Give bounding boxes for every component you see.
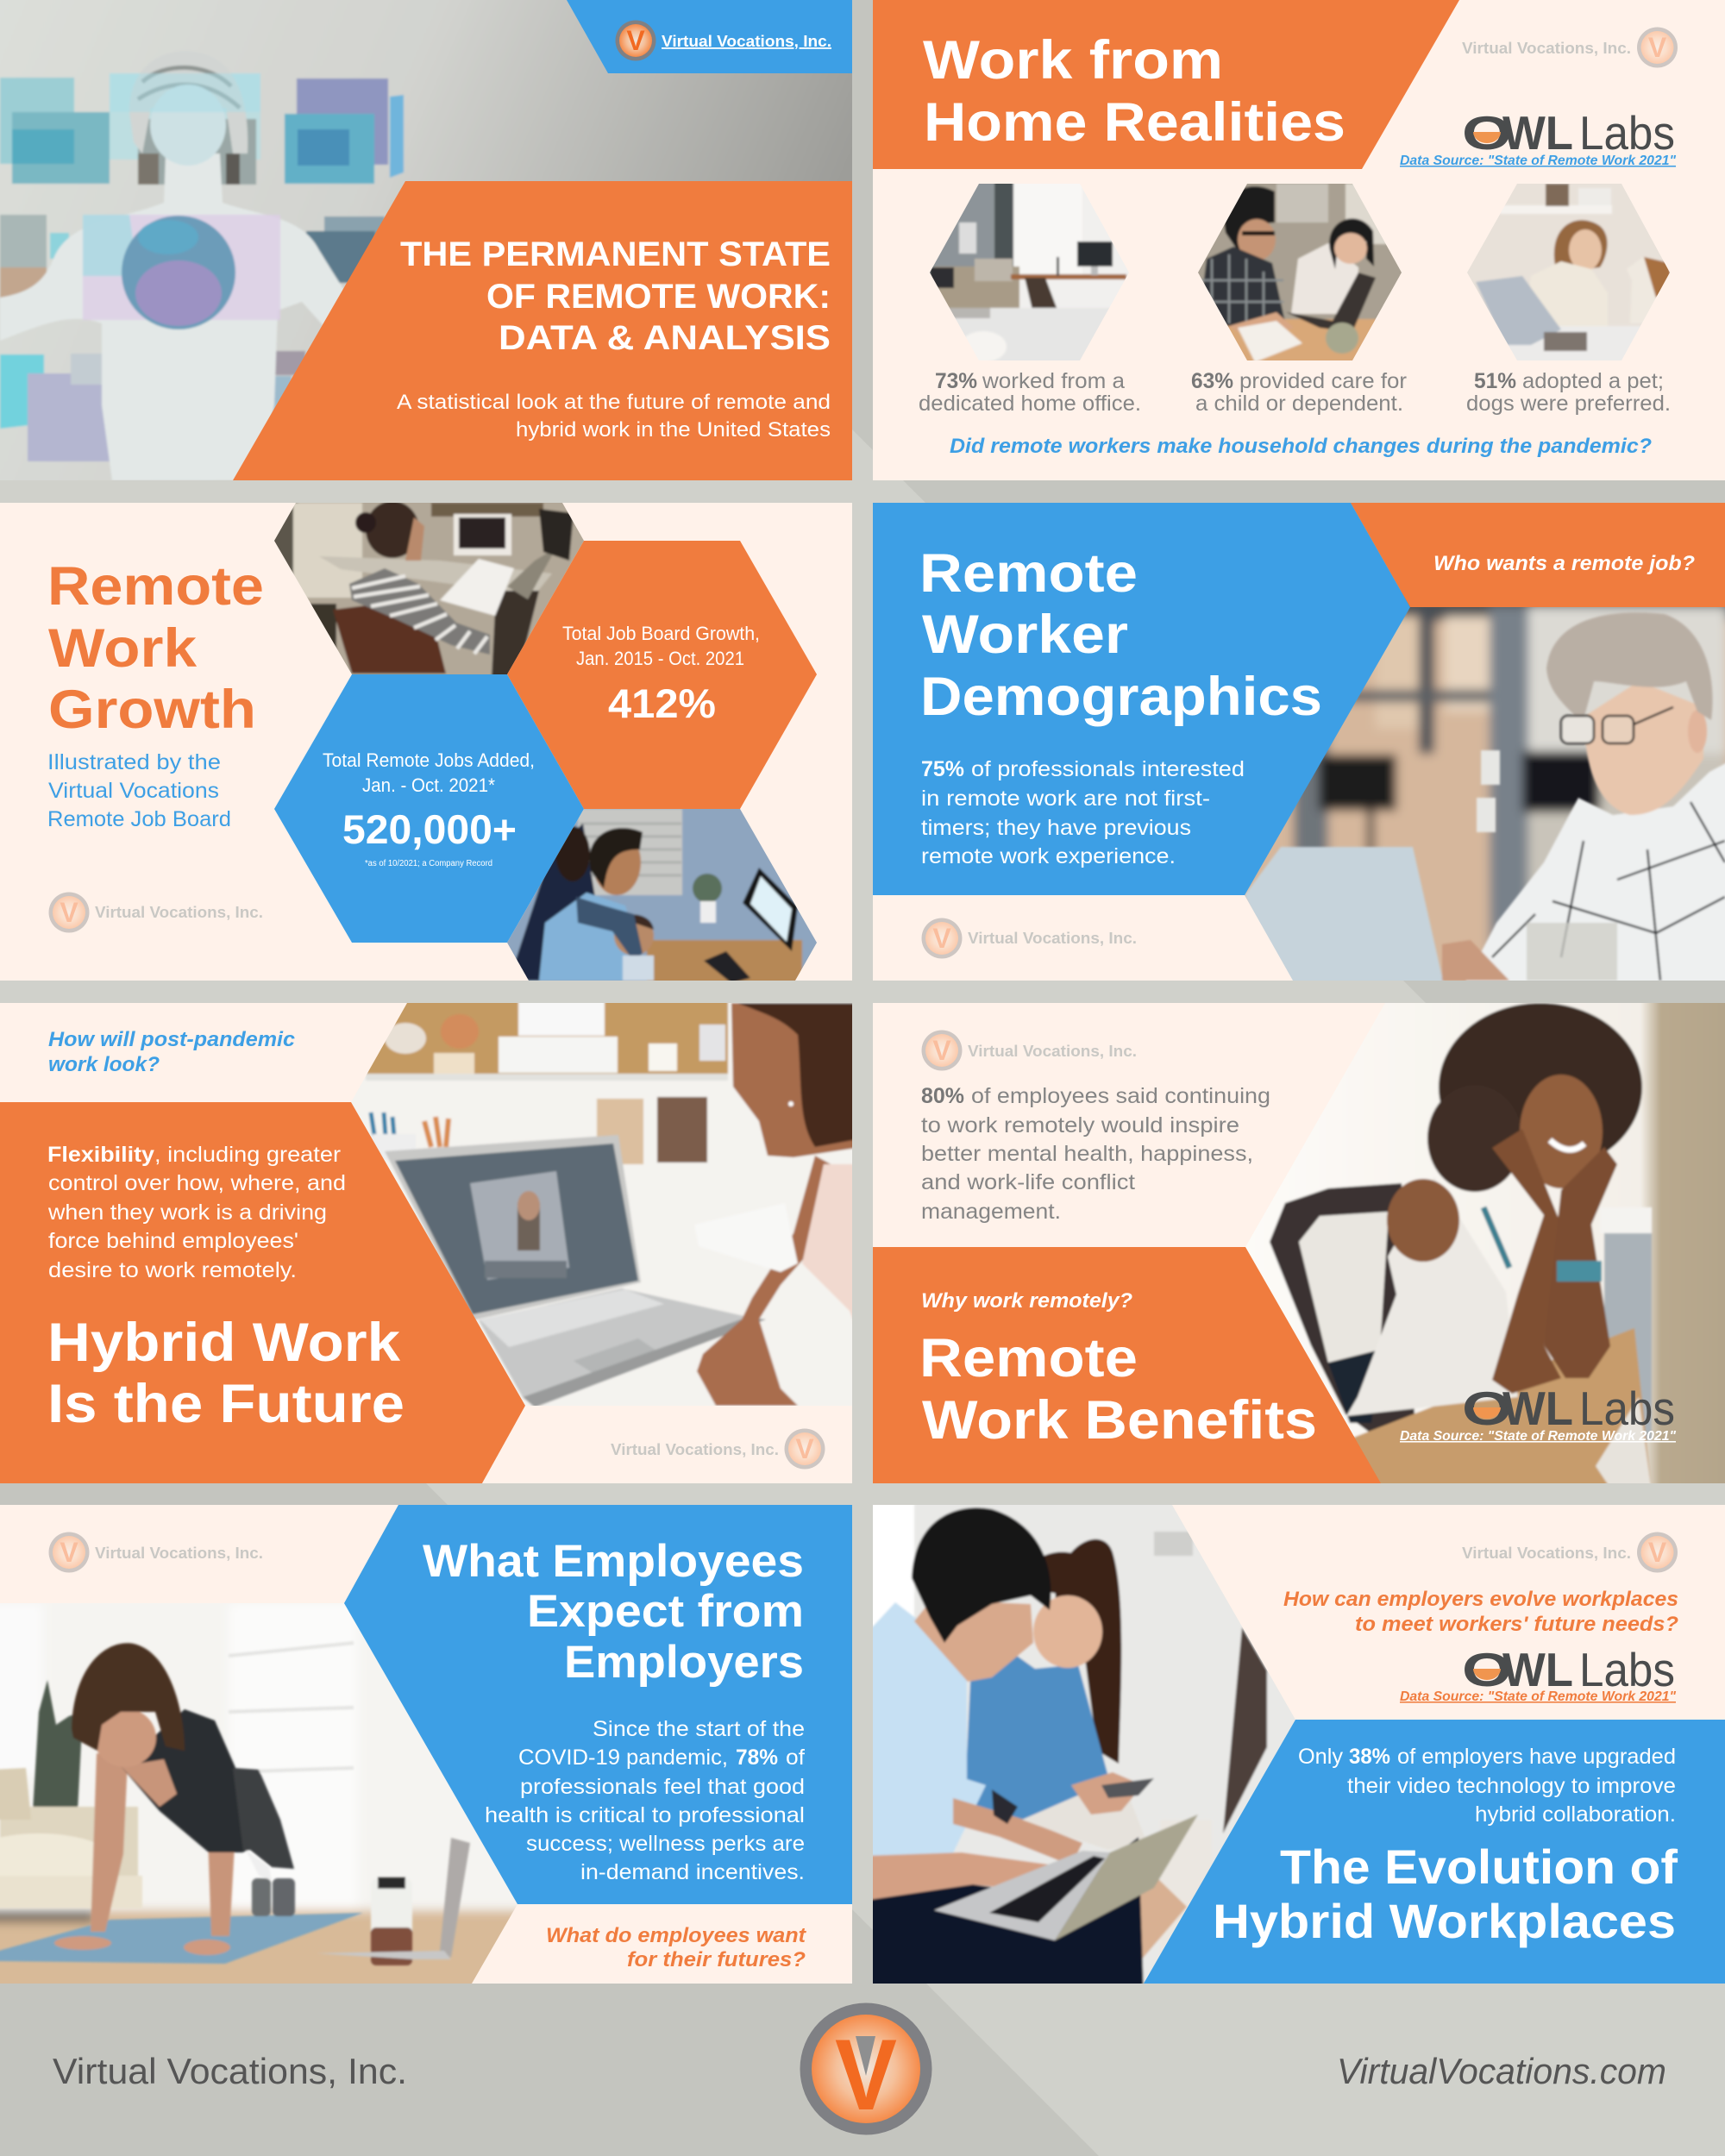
- watermark block: V: [932, 923, 951, 954]
- body text: in-demand incentives.: [580, 1860, 805, 1884]
- icon: virtual vocations logo: [616, 21, 656, 60]
- owl labs logo: O: [1462, 1382, 1512, 1435]
- caption: 73%: 73%: [935, 369, 977, 393]
- heading: Remote: [47, 556, 264, 617]
- hexagon: remote jobs added: Total Remote Jobs Added,: [323, 749, 535, 771]
- title block: Demographics: [920, 667, 1322, 727]
- body text: timers; they have previous: [921, 816, 1191, 840]
- caption: 73%: [919, 369, 1141, 416]
- owl labs logo: O: [1462, 1643, 1512, 1696]
- watermark logo: Virtual Vocations, Inc.: [968, 1043, 1137, 1060]
- title: THE PERMANENT STATE: [400, 235, 831, 273]
- question: Did remote workers make household changes during the pandemic?: [950, 435, 1652, 458]
- body text: [1298, 1745, 1676, 1827]
- photo: smiling woman: [1233, 992, 1725, 1501]
- question block: for their futures?: [627, 1948, 806, 1971]
- photo: family at computer: [505, 802, 819, 983]
- body text: 38%: [1349, 1745, 1390, 1769]
- text block: [1172, 1505, 1725, 1720]
- figure body: [0, 154, 362, 480]
- title: Expect from: [527, 1586, 804, 1637]
- caption: 63%: 63%: [1191, 369, 1233, 393]
- watermark logo: Virtual Vocations, Inc.: [95, 904, 263, 921]
- question block: [0, 1003, 407, 1102]
- body text: management.: [921, 1200, 1061, 1224]
- title banner: Work from: [923, 30, 1223, 91]
- body text: health is critical to professional: [485, 1803, 805, 1827]
- question: to meet workers' future needs?: [1355, 1613, 1678, 1636]
- text block: [873, 1003, 1385, 1247]
- hexagon: job board growth: Jan. 2015 - Oct. 2021: [576, 648, 744, 669]
- title: Employers: [564, 1637, 804, 1688]
- photo: virtual figure with floating screens: [0, 0, 871, 500]
- body text: in remote work are not first-: [921, 787, 1210, 811]
- photo: woman doing plank: [0, 1587, 535, 2001]
- watermark block: [873, 895, 1293, 981]
- company name: Virtual Vocations, Inc.: [53, 2051, 407, 2091]
- title block: Why work remotely?: [921, 1289, 1132, 1313]
- photo: couple with laptop: [873, 1505, 1295, 1984]
- body text: of employees said continuing: [971, 1084, 1270, 1108]
- hexagon: job board growth: Total Job Board Growth,: [562, 623, 760, 644]
- subtitle: [397, 391, 831, 442]
- link: Virtual Vocations, Inc.: [662, 33, 831, 50]
- watermark block: V: [60, 1537, 78, 1568]
- data source: Data Source: "State of Remote Work 2021": [1400, 154, 1677, 168]
- watermark block: Virtual Vocations, Inc.: [95, 1545, 263, 1562]
- panel: the permanent state of remote work: [0, 0, 871, 500]
- website: VirtualVocations.com: [1337, 2051, 1666, 2091]
- heading: [47, 556, 264, 740]
- title: Hybrid Work: [47, 1313, 401, 1373]
- body text: COVID-19 pandemic,: [518, 1745, 728, 1770]
- body text: desire to work remotely.: [48, 1258, 297, 1282]
- heading: Growth: [48, 680, 256, 740]
- watermark logo: V: [1648, 1537, 1667, 1568]
- question block: [472, 1904, 852, 1984]
- title block: Worker: [922, 605, 1128, 665]
- title: Is the Future: [47, 1374, 405, 1434]
- owl labs logo: WL: [1502, 1643, 1573, 1696]
- heading: Work: [48, 618, 198, 679]
- owl labs logo: WL: [1502, 106, 1573, 160]
- photo: parent and child: [1198, 184, 1402, 360]
- owl labs logo: [1462, 106, 1675, 160]
- title block: Remote: [919, 543, 1138, 604]
- body text: hybrid collaboration.: [1475, 1802, 1676, 1827]
- owl labs logo: Labs: [1579, 106, 1675, 160]
- watermark logo: V: [932, 1035, 951, 1066]
- title: [400, 235, 831, 357]
- watermark logo: Virtual Vocations, Inc.: [1462, 40, 1631, 57]
- subtitle: hybrid work in the United States: [516, 418, 831, 442]
- body text: 80%: [921, 1084, 964, 1108]
- subheading: Virtual Vocations: [48, 779, 219, 803]
- body text: of: [786, 1745, 805, 1770]
- panel: the evolution of hybrid workplaces: [862, 1496, 1725, 1996]
- watermark logo: [1462, 28, 1678, 67]
- body text: [485, 1717, 805, 1884]
- body text: 78%: [736, 1745, 778, 1770]
- body text: , including greater: [154, 1143, 341, 1167]
- body text: their video technology to improve: [1347, 1774, 1676, 1798]
- body text: [921, 757, 1245, 868]
- watermark logo: V: [1648, 32, 1667, 63]
- question block: How will post-pandemic: [48, 1028, 295, 1051]
- caption: 51%: 51%: [1474, 369, 1516, 393]
- watermark block: V: [795, 1433, 814, 1464]
- body text: Only: [1298, 1745, 1344, 1769]
- owl labs logo: [1462, 1382, 1675, 1435]
- title block: [873, 503, 1410, 895]
- footer: [53, 2002, 1666, 2135]
- owl labs logo: Labs: [1579, 1643, 1675, 1696]
- caption: 51%: adopted a pet;: [1522, 369, 1664, 393]
- subheading: [47, 750, 231, 831]
- question: How can employers evolve workplaces: [1283, 1588, 1678, 1611]
- data source: Data Source: "State of Remote Work 2021": [1400, 1689, 1677, 1704]
- top tag: [567, 0, 852, 73]
- title: What Employees: [423, 1536, 804, 1587]
- title block: [873, 1247, 1381, 1483]
- owl labs logo: WL: [1502, 1382, 1573, 1435]
- panel: what employees expect from employers: [0, 1505, 852, 2001]
- caption: 73%: worked from a: [982, 369, 1125, 393]
- panel: remote work benefits: [873, 992, 1725, 1501]
- hexagon: remote jobs added: *as of 10/2021; a Company Record: [365, 859, 492, 868]
- title block: [344, 1505, 852, 1904]
- body text: remote work experience.: [921, 844, 1176, 868]
- watermark block: Virtual Vocations, Inc.: [968, 930, 1137, 947]
- title: [1213, 1839, 1678, 1948]
- title block: Remote: [919, 1328, 1138, 1388]
- body text: success; wellness perks are: [526, 1832, 805, 1856]
- subheading: Illustrated by the: [47, 750, 221, 774]
- body text: control over how, where, and: [48, 1171, 346, 1195]
- title: The Evolution of: [1280, 1839, 1678, 1894]
- data source: Data Source: "State of Remote Work 2021": [1400, 1429, 1677, 1444]
- caption: 63%: a child or dependent.: [1195, 392, 1403, 416]
- watermark block: [0, 1505, 398, 1603]
- photo: video call on laptop: [351, 1003, 852, 1420]
- watermark logo: V: [60, 897, 78, 928]
- subtitle: A statistical look at the future of remote and: [397, 391, 831, 414]
- title banner: [873, 0, 1459, 169]
- question banner: [1351, 503, 1725, 607]
- panel: remote work growth: [0, 496, 852, 983]
- photo: woman at desk: [274, 503, 584, 674]
- panel: work from home realities: [873, 0, 1725, 480]
- panel: remote worker demographics: [873, 503, 1725, 1000]
- body text: better mental health, happiness,: [921, 1142, 1253, 1166]
- panel: hybrid work is the future: [0, 992, 871, 1483]
- hexagon: job board growth: [507, 541, 817, 809]
- caption: 73%: dedicated home office.: [919, 392, 1141, 416]
- watermark logo: Virtual Vocations, Inc.: [1462, 1545, 1631, 1562]
- body text: of professionals interested: [971, 757, 1245, 781]
- icon: virtual vocations logo: [800, 2002, 932, 2135]
- body text: and work-life conflict: [921, 1170, 1135, 1194]
- caption: 51%: [1466, 369, 1671, 416]
- hexagon: job board growth: 412%: [608, 680, 716, 726]
- watermark block: [482, 1406, 852, 1483]
- caption: 51%: dogs were preferred.: [1466, 392, 1671, 416]
- icon: virtual vocations logo: V: [835, 2018, 897, 2131]
- body text: force behind employees': [48, 1229, 298, 1253]
- body text: to work remotely would inspire: [921, 1113, 1239, 1138]
- question block: What do employees want: [546, 1924, 806, 1947]
- photo: woman with dog: [1467, 184, 1670, 360]
- photo: older woman at laptop: [1233, 595, 1725, 1000]
- title: OF REMOTE WORK:: [486, 278, 831, 316]
- body text: [47, 1143, 346, 1282]
- photo: home office: [930, 184, 1129, 360]
- subheading: Remote Job Board: [47, 807, 231, 831]
- title: [423, 1536, 804, 1688]
- owl labs logo: Labs: [1579, 1382, 1675, 1435]
- icon: virtual vocations logo: V: [626, 25, 645, 56]
- watermark logo: [48, 892, 263, 933]
- title: DATA & ANALYSIS: [499, 319, 831, 357]
- title block: [1144, 1720, 1725, 1984]
- body text: of employers have upgraded: [1397, 1745, 1676, 1769]
- watermark block: Virtual Vocations, Inc.: [611, 1441, 779, 1458]
- body text: when they work is a driving: [47, 1200, 327, 1225]
- body text: Flexibility: [47, 1143, 154, 1167]
- body text: 75%: [921, 757, 964, 781]
- caption: 63%: provided care for: [1239, 369, 1407, 393]
- owl labs logo: O: [1462, 106, 1512, 160]
- body text: Since the start of the: [593, 1717, 805, 1741]
- question banner: Who wants a remote job?: [1433, 552, 1695, 575]
- hexagon: remote jobs added: 520,000+: [342, 806, 517, 852]
- hexagon: remote jobs added: [274, 674, 584, 943]
- question: [1283, 1588, 1678, 1636]
- title: [47, 1313, 405, 1434]
- owl labs logo: [1462, 1643, 1675, 1696]
- watermark logo: [1462, 1532, 1678, 1573]
- title: Hybrid Workplaces: [1213, 1894, 1676, 1948]
- body text: professionals feel that good: [520, 1775, 805, 1799]
- question block: work look?: [48, 1053, 160, 1076]
- body text: [921, 1084, 1270, 1224]
- watermark logo: [921, 1030, 1137, 1071]
- title block: [0, 1102, 525, 1483]
- title block: [233, 181, 852, 480]
- title banner: Home Realities: [924, 92, 1346, 153]
- title block: Work Benefits: [922, 1390, 1317, 1451]
- hexagon: remote jobs added: Jan. - Oct. 2021*: [362, 774, 495, 796]
- caption: 63%: [1191, 369, 1407, 416]
